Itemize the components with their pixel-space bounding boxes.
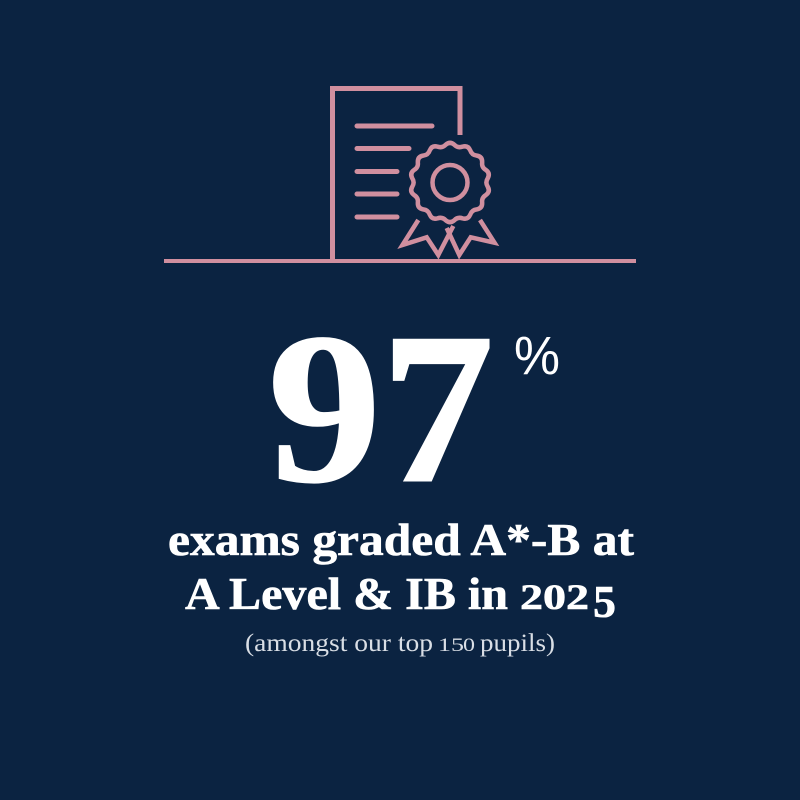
ground line: [164, 259, 636, 263]
document outline: [332, 88, 460, 261]
percent sign: %: [514, 326, 560, 386]
left ribbon: [402, 220, 453, 255]
sub-caption: 15: [438, 635, 464, 656]
sub-caption: pupils): [480, 630, 555, 657]
heading line 2: 5: [593, 576, 616, 627]
rosette scalloped edge: [411, 143, 489, 222]
sub-caption: (amongst our top: [245, 630, 433, 657]
heading line 2: [185, 568, 616, 627]
document text lines: [357, 126, 432, 217]
heading line 1: exams graded A*-B at: [168, 514, 635, 565]
icon: certificate with rosette: [164, 88, 636, 261]
sub-caption: [245, 630, 555, 657]
rosette inner circle: [432, 165, 468, 200]
heading line 2: A Level & IB in: [185, 568, 508, 619]
big number 97: 97: [268, 288, 494, 528]
heading line 2: 202: [520, 577, 589, 617]
sub-caption: 0: [463, 635, 475, 656]
right ribbon: [447, 220, 494, 255]
